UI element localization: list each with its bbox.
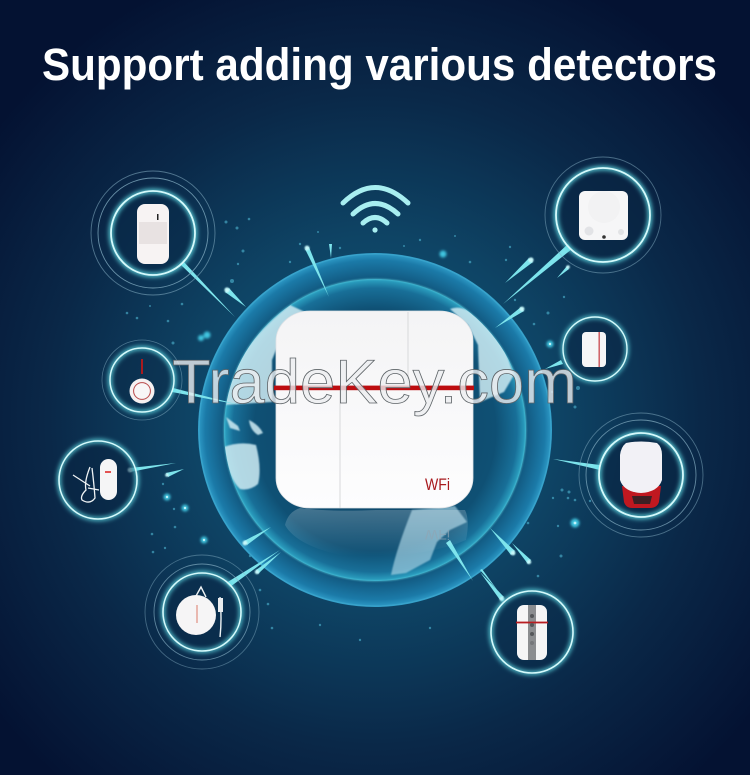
panel seams <box>340 312 408 508</box>
globe <box>198 253 552 607</box>
meteor heads <box>128 246 570 601</box>
watermark: TradeKey.com <box>172 348 577 417</box>
device: panic button <box>102 340 182 420</box>
red stripe <box>274 386 474 390</box>
title: Support adding various detectors <box>42 39 717 90</box>
continents <box>223 305 514 575</box>
device: smoke detector square <box>545 157 661 273</box>
hub panel <box>274 311 474 508</box>
glowing particles <box>164 250 580 544</box>
device: door sensor <box>563 317 627 381</box>
device: outdoor siren <box>579 413 703 537</box>
reflection of hub <box>285 508 468 556</box>
device: water leak sensor <box>59 441 137 519</box>
device: round smoke detector <box>145 555 259 669</box>
beams and meteors <box>128 244 600 601</box>
reflected WiFi mark: WFi <box>425 527 450 543</box>
wifi icon <box>343 188 408 233</box>
inner sphere <box>224 279 526 581</box>
scattered star particles <box>126 218 591 641</box>
device: PIR motion sensor <box>91 171 215 295</box>
WiFi mark: WFi <box>425 475 450 494</box>
outer shell <box>198 253 552 607</box>
device: remote control <box>491 591 573 673</box>
